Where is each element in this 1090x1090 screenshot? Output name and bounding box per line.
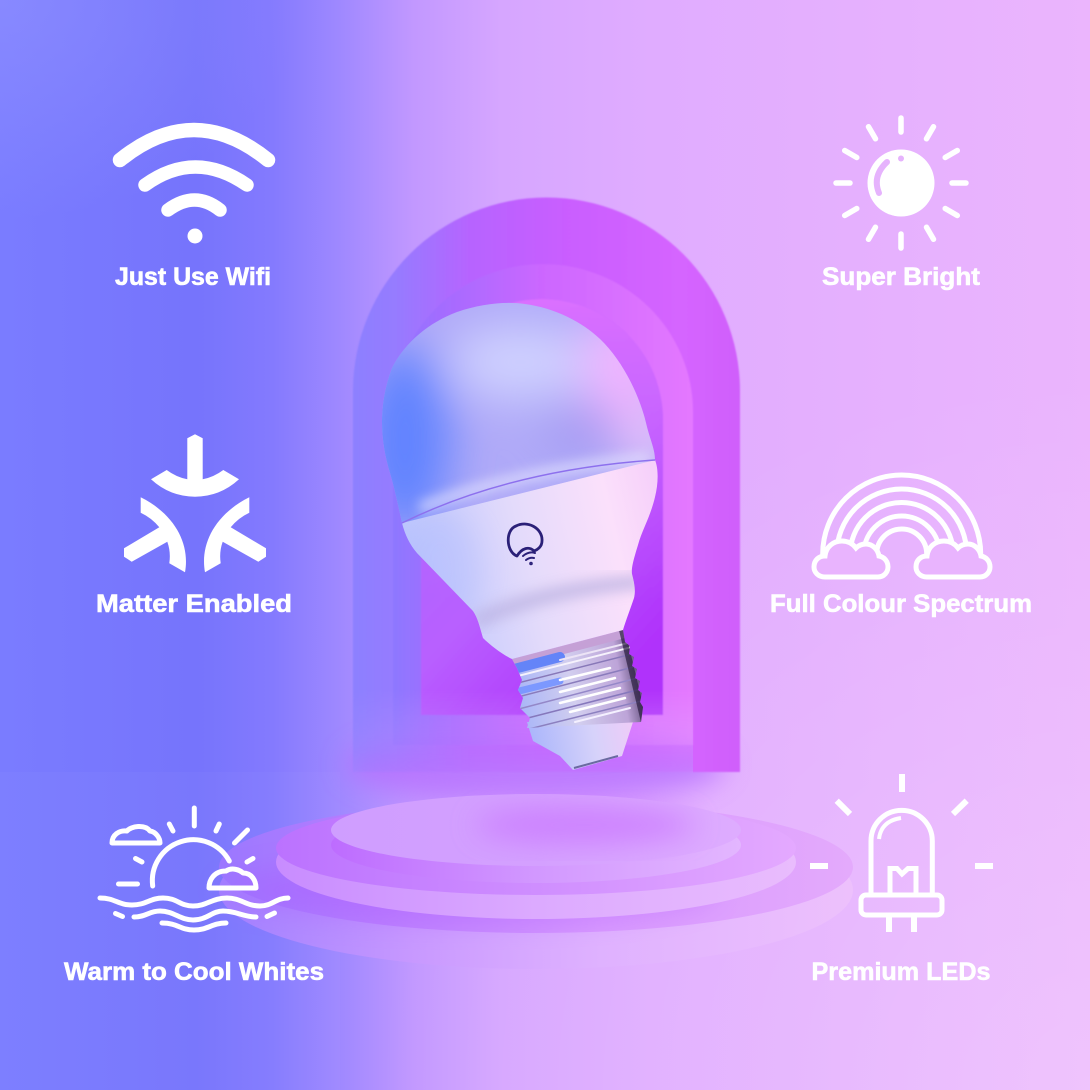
- podium middle step: [276, 801, 796, 919]
- seam line: [402, 460, 655, 523]
- label: full colour spectrum: Full Colour Spectrum: [770, 590, 1032, 618]
- feature: full colour spectrum: [770, 475, 1032, 618]
- bulb body base: [402, 460, 658, 659]
- outer arch: [353, 198, 740, 772]
- feature: matter enabled: [96, 434, 292, 618]
- label: just use wifi: Just Use Wifi: [115, 263, 271, 291]
- bulb cap: [527, 722, 633, 770]
- middle arch: [534, 266, 694, 744]
- feature: warm to cool whites: [64, 808, 324, 986]
- icon: matter logo: [124, 434, 266, 572]
- stepped circular podium: [219, 794, 853, 969]
- icon: led diode: [810, 774, 993, 932]
- metal screw thread: [512, 630, 643, 728]
- label: warm to cool whites: Warm to Cool Whites: [64, 958, 324, 986]
- floor glow: [345, 727, 725, 803]
- podium top step: [331, 794, 741, 883]
- icon: sun: [836, 118, 966, 248]
- bulb logo: [508, 524, 542, 564]
- smart light bulb: [382, 302, 658, 770]
- archway tunnel: [353, 198, 740, 772]
- feature: just use wifi: [115, 130, 271, 291]
- icon: wifi: [120, 130, 268, 244]
- label: premium leds: Premium LEDs: [812, 958, 990, 986]
- inner arch: [421, 299, 663, 715]
- icon: sunset over water: [100, 808, 288, 930]
- icon: rainbow: [814, 475, 990, 577]
- feature: premium leds: [810, 774, 993, 986]
- feature: super bright: [822, 118, 981, 291]
- podium bottom step: [219, 801, 853, 969]
- bulb dome: [382, 302, 655, 522]
- podium shadow: [220, 858, 720, 922]
- label: matter enabled: Matter Enabled: [96, 590, 292, 618]
- label: super bright: Super Bright: [822, 263, 981, 291]
